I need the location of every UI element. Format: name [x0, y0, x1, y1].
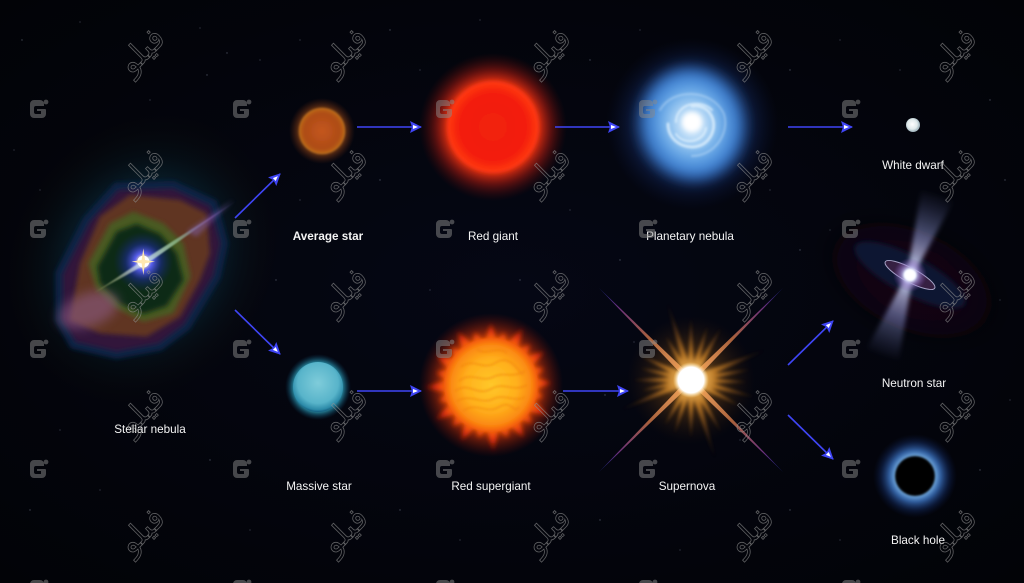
watermark text: فیلو [719, 380, 781, 443]
labels: Neutron star [882, 377, 946, 390]
watermark text: فیلو [922, 500, 984, 563]
watermark text: فیلو [313, 380, 375, 443]
watermark text: فیلو [313, 140, 375, 203]
labels: White dwarf [882, 159, 945, 172]
watermark text: فیلو [110, 20, 172, 83]
labels: Supernova [659, 480, 716, 493]
white dwarf [906, 118, 920, 132]
stellar nebula [0, 61, 336, 456]
massive star [285, 354, 351, 420]
red supergiant [419, 313, 563, 457]
watermark text: فیلو [110, 260, 172, 323]
watermark text: فیلو [313, 500, 375, 563]
watermark text: فیلو [922, 260, 984, 323]
watermark text: فیلو [719, 20, 781, 83]
labels [114, 159, 946, 547]
labels: Black hole [891, 534, 945, 547]
labels: Red giant [468, 230, 519, 243]
watermark text: فیلو [516, 380, 578, 443]
red giant [419, 53, 567, 201]
watermark text: فیلو [516, 20, 578, 83]
neutron star [791, 180, 1024, 381]
watermark text: فیلو [719, 140, 781, 203]
labels: Stellar nebula [114, 423, 186, 436]
watermark text: فیلو [922, 140, 984, 203]
watermark text: فیلو [110, 140, 172, 203]
labels: Red supergiant [451, 480, 531, 493]
black hole [873, 434, 957, 518]
long diagonal spikes [599, 288, 783, 472]
watermark text: فیلو [110, 380, 172, 443]
supernova [599, 288, 783, 472]
arrows [235, 127, 852, 459]
short rays [619, 299, 769, 465]
watermark text: فیلو [516, 500, 578, 563]
watermark text: فیلو [719, 260, 781, 323]
watermark text: فیلو [516, 140, 578, 203]
average star [289, 98, 355, 164]
watermark text: فیلو [922, 380, 984, 443]
labels: Massive star [286, 480, 352, 493]
watermark text [110, 20, 984, 563]
watermark text: فیلو [719, 500, 781, 563]
watermark text: فیلو [313, 260, 375, 323]
watermark text: فیلو [516, 260, 578, 323]
labels: Planetary nebula [646, 230, 734, 243]
watermark text: فیلو [110, 500, 172, 563]
spiral arms [660, 94, 725, 156]
watermark text: فیلو [922, 20, 984, 83]
watermark icons [30, 100, 860, 583]
planetary nebula [606, 38, 778, 210]
watermark text: فیلو [313, 20, 375, 83]
labels: Average star [293, 230, 364, 243]
